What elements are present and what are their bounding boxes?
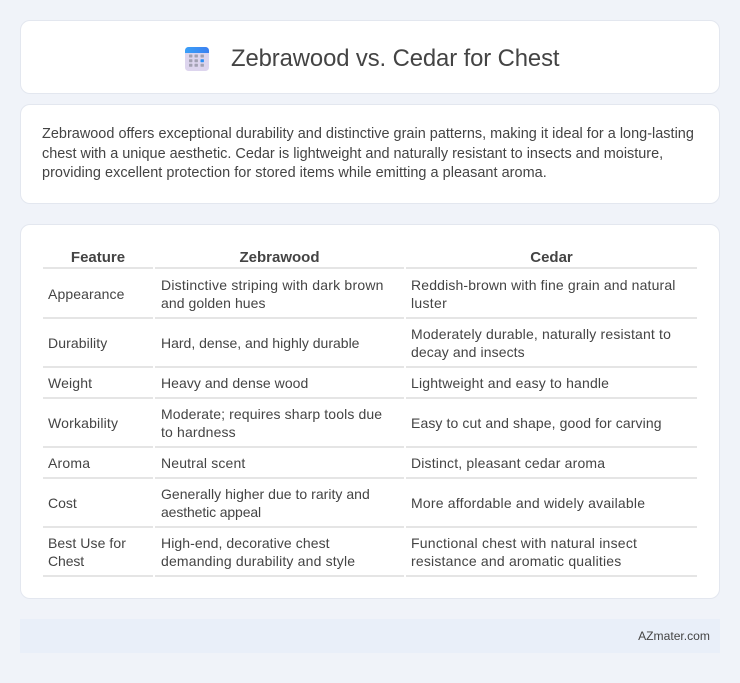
comparison table: aesthetic appeal: [161, 504, 261, 520]
comparison table: demanding durability and style: [161, 553, 355, 569]
comparison table: luster: [411, 295, 447, 311]
comparison table: to hardness: [161, 424, 236, 440]
comparison table: Reddish-brown with fine grain and natural: [411, 277, 676, 293]
intro text: Zebrawood offers exceptional durability and distinctive grain patterns, making it ideal for a long-lasting: [42, 126, 694, 142]
footer credit: AZmater.com: [638, 629, 710, 643]
comparison table: Distinctive striping with dark brown: [161, 277, 384, 293]
comparison table: Distinct, pleasant cedar aroma: [411, 455, 605, 471]
row: Durability: Durability: [48, 335, 107, 351]
comparison table: resistance and aromatic qualities: [411, 553, 621, 569]
row: Best Use for Chest: Chest: [48, 553, 84, 569]
title: Zebrawood vs. Cedar for Chest: [231, 45, 559, 72]
comparison table: Moderate; requires sharp tools due: [161, 406, 382, 422]
header: Cedar: Cedar: [530, 249, 573, 266]
comparison table: Generally higher due to rarity and: [161, 486, 370, 502]
row: Workability: Workability: [48, 415, 118, 431]
header: Feature: Feature: [71, 249, 125, 266]
row: Cost: Cost: [48, 495, 77, 511]
intro text: [42, 126, 694, 181]
comparison table: More affordable and widely available: [411, 495, 645, 511]
row: Appearance: Appearance: [48, 286, 125, 302]
icon: calendar: [185, 47, 209, 71]
intro text: providing excellent protection for stored items while emitting a pleasant aroma.: [42, 165, 547, 181]
row: Best Use for Chest: Best Use for: [48, 535, 126, 551]
comparison table: Heavy and dense wood: [161, 375, 308, 391]
comparison table: decay and insects: [411, 344, 525, 360]
title card: [20, 20, 720, 94]
comparison table: Functional chest with natural insect: [411, 535, 637, 551]
table card: [20, 224, 720, 599]
comparison table: Hard, dense, and highly durable: [161, 335, 359, 351]
comparison table: High-end, decorative chest: [161, 535, 330, 551]
intro card: [20, 104, 720, 204]
row: Aroma: Aroma: [48, 455, 90, 471]
comparison table: Lightweight and easy to handle: [411, 375, 609, 391]
comparison table: and golden hues: [161, 295, 266, 311]
comparison table: Easy to cut and shape, good for carving: [411, 415, 662, 431]
comparison table: Neutral scent: [161, 455, 245, 471]
row: Weight: Weight: [48, 375, 92, 391]
footer bar: [20, 619, 720, 653]
intro text: chest with a unique aesthetic. Cedar is lightweight and naturally resistant to insects and moisture,: [42, 146, 663, 162]
header: Zebrawood: Zebrawood: [239, 249, 320, 266]
row: Best Use for Chest: [48, 535, 126, 569]
comparison table: Moderately durable, naturally resistant to: [411, 326, 671, 342]
